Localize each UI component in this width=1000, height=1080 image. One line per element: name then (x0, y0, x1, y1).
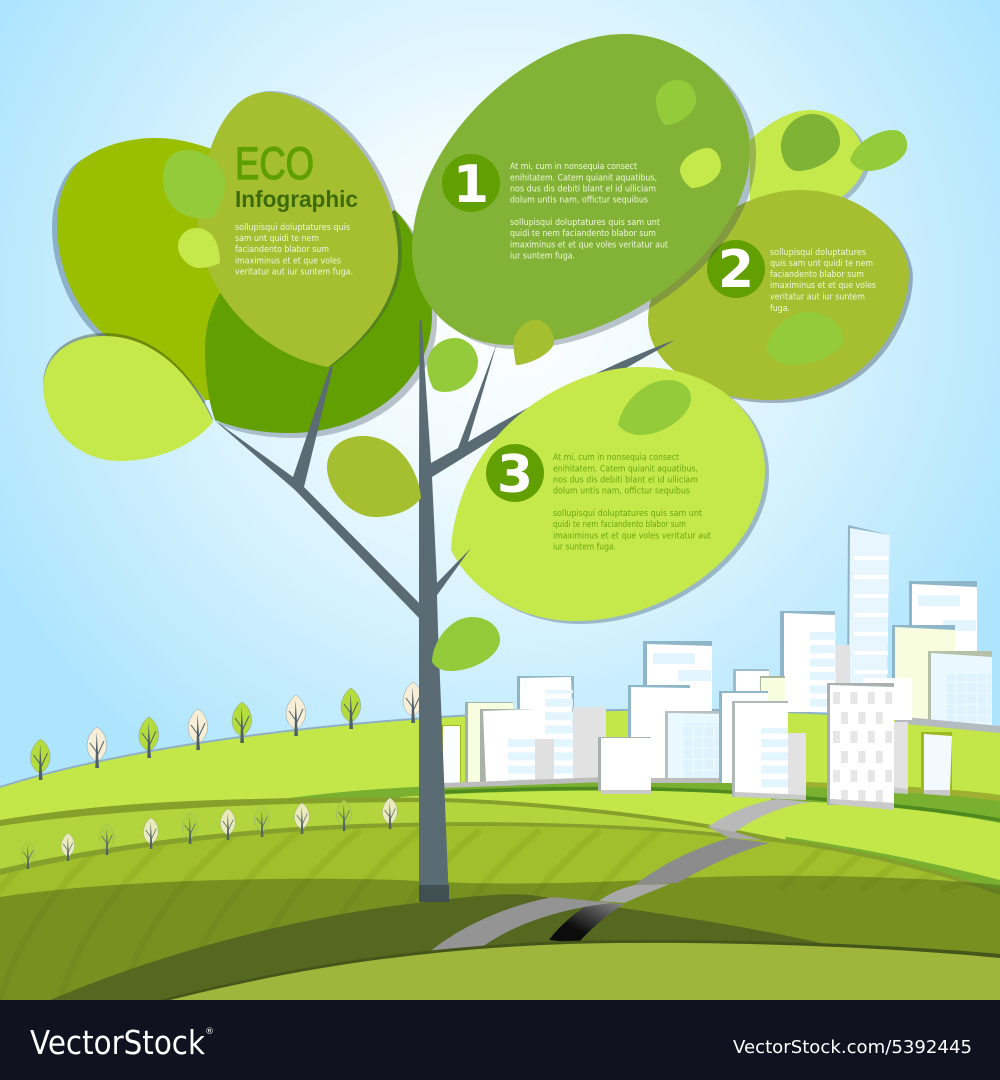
striped field (0, 822, 1000, 1000)
leaf: top right small (850, 130, 907, 171)
field band with tree row (0, 797, 1000, 1000)
panel 2 text (770, 247, 876, 313)
ECO panel text: sam unt quidi te nem (235, 233, 319, 243)
panel 1 text: At mi, cum in nonsequia consect (510, 161, 638, 171)
ECO panel text: veritatur aut iur suntem fuga. (235, 266, 353, 276)
leaf: panel 1 upper small (656, 80, 696, 125)
number badge 2: 2 (718, 240, 754, 300)
panel 2 text: imaximinus et et que voles (770, 280, 876, 290)
panel 1 text (510, 161, 669, 261)
leaf: large left (52, 138, 240, 403)
panel 3 text: enihitatem. Catem quianit aquatibus, (553, 463, 698, 473)
leaf: ECO small light (178, 228, 220, 268)
back buildings (733, 525, 1000, 733)
panel 3 text (553, 452, 712, 552)
panel 3 text: dolum untis nam, offictur sequibus (553, 486, 690, 496)
middle buildings right (732, 678, 952, 810)
number badge 3 (486, 444, 544, 505)
watermark id: VectorStock.com/5392445 (733, 1037, 972, 1058)
dark hill edge (445, 789, 1000, 820)
panel 2 text: veritatur aut iur suntem (770, 292, 865, 302)
leaf: lower trunk (432, 617, 500, 671)
leaf: panel 3 (451, 367, 769, 624)
leaf: dark green centre (205, 210, 437, 438)
watermark logo: VectorStock (30, 1023, 206, 1062)
registered mark: ® (205, 1027, 214, 1037)
leaf: bottom left (43, 333, 213, 461)
panel 1 text: sollupisqui doluptatures quis sam unt (510, 217, 661, 227)
leaf: top right inner dark (781, 114, 840, 171)
leaf: ECO panel (198, 91, 402, 367)
middle buildings centre (598, 685, 768, 794)
leaf: panel 1 bottom olive (514, 320, 554, 365)
panel 1 text: iur suntem fuga. (510, 251, 575, 261)
bottom hill (160, 940, 1000, 1000)
leaf: panel 1 (412, 34, 750, 345)
leaf: panel 3 small (618, 380, 691, 435)
panel 3 text: sollupisqui doluptatures quis sam unt (553, 508, 703, 518)
ECO panel text: imaximinus et et que voles (235, 255, 341, 265)
panel 1 text: nos dus dis debiti blant el id ulliciam (510, 183, 656, 193)
mid ground band (250, 780, 1000, 900)
city skyline (440, 525, 1000, 810)
ECO panel text (235, 222, 353, 276)
watermark bar (0, 1000, 1000, 1080)
trunk base shadow (419, 885, 449, 902)
panel 2 text: sollupisqui doluptatures (770, 247, 866, 257)
ECO panel text: sollupisqui doluptatures quis (235, 222, 350, 232)
leaf: ECO small green (163, 150, 225, 218)
panel 1 text: imaximinus et et que voles veritatur aut (510, 239, 669, 249)
dark valley shadow (50, 894, 830, 1000)
title: ECO: ECO (235, 138, 314, 189)
number badge 2 (707, 240, 765, 300)
near row of small trees (21, 798, 397, 869)
far row of small trees (30, 682, 423, 780)
panel 3 text: nos dus dis debiti blant el id ulliciam (553, 474, 698, 484)
title: Infographic: Infographic (235, 186, 358, 212)
panel 2 text: quis sam unt quidi te nem (770, 258, 873, 268)
leaf: branch olive (327, 436, 421, 517)
lower right twig (437, 548, 471, 595)
meadow upper (400, 790, 790, 850)
ECO panel text: faciandento blabor sum (235, 244, 329, 254)
leaf: branch green (427, 338, 478, 392)
number badge 3: 3 (497, 445, 533, 505)
panel 1 text: quidi te nem faciandento blabor sum (510, 228, 656, 238)
panel 1 text: dolum untis nam, offictur sequibus (510, 195, 648, 205)
leaf shadow: panel 1 (418, 38, 756, 349)
right bright hill (737, 802, 1000, 880)
number badge 1 (442, 154, 500, 215)
leaf: top right light leaf (750, 110, 869, 203)
panel 2 text: fuga. (770, 303, 790, 313)
leaf: panel 2 (648, 190, 913, 403)
leaf: panel 1 light small (680, 148, 721, 188)
panel 3 text: quidi te nem faciandento blabor sum (553, 519, 686, 529)
panel 3 text: iur suntem fuga. (553, 542, 616, 552)
panel 1 text: enihitatem. Catem quianit aquatibus, (510, 172, 657, 182)
panel 3 text: imaximinus et et que voles veritatur aut (553, 530, 712, 540)
panel 2 text: faciandento blabor sum (770, 269, 864, 279)
number badge 1: 1 (453, 155, 489, 215)
field shadow overlay (0, 876, 1000, 1000)
winding road (425, 799, 811, 956)
middle buildings left (440, 641, 712, 788)
leaf: panel 2 lower small (766, 312, 843, 365)
panel 3 text: At mi, cum in nonsequia consect (553, 452, 680, 462)
tree trunk and branches (213, 320, 675, 902)
far hill (0, 709, 1000, 1000)
